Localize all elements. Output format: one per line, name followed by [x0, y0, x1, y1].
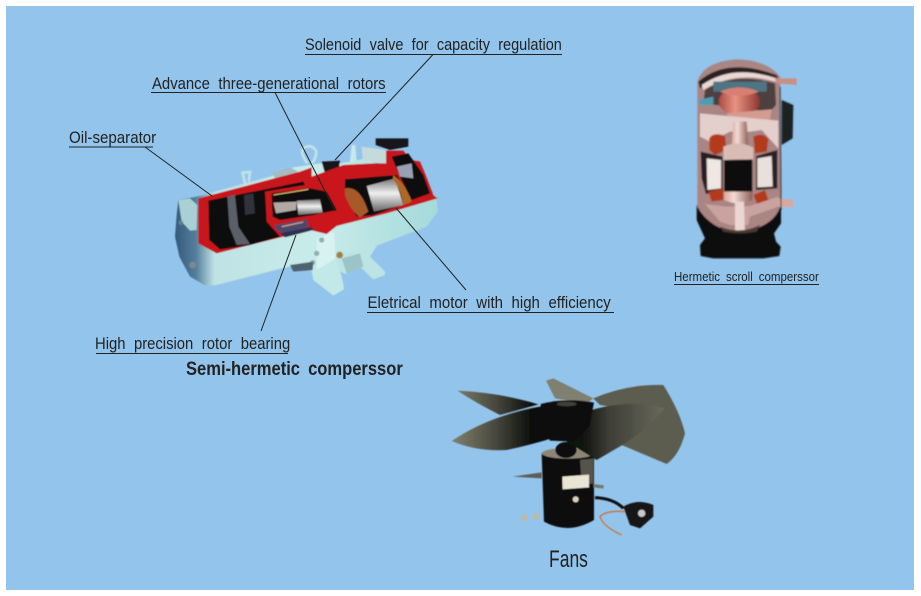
motor label: [562, 475, 589, 489]
label: solenoid valve: [305, 36, 562, 160]
mounting brackets: [513, 472, 542, 478]
oil separator chamber: [208, 182, 305, 249]
label: rotors: Advance three-generational rotors: [152, 75, 386, 93]
left lower blade: [452, 406, 552, 450]
top dome: [698, 67, 778, 88]
lifting eyes: [243, 146, 316, 183]
terminal box interior: [392, 153, 430, 200]
caption: fans: Fans: [549, 545, 588, 572]
rotor: [723, 143, 753, 160]
discharge and suction fittings: [775, 78, 797, 85]
hermetic scroll compressor illustration: [697, 59, 797, 258]
right rear blade: [593, 385, 685, 464]
motor body: [542, 449, 594, 528]
end cap fittings: [178, 198, 197, 231]
lower bearing: [705, 197, 778, 225]
windings: [709, 134, 727, 155]
base: [697, 205, 781, 258]
label: solenoid valve: Solenoid valve for capacity regulation: [305, 36, 562, 54]
back blade: [546, 378, 593, 403]
shell: [175, 158, 438, 285]
label: electrical motor: [367, 208, 614, 312]
stator: [701, 152, 723, 194]
label: oil separator: [69, 129, 212, 196]
side box and pipe: [782, 100, 793, 145]
feet and mounting bracket: [310, 257, 344, 296]
shell: [697, 59, 781, 233]
red cut section: [198, 151, 438, 253]
right front blade: [567, 404, 665, 460]
hub: [541, 400, 594, 442]
rotor chamber: [272, 188, 337, 220]
label: oil separator: Oil-separator: [69, 129, 156, 147]
upper frame: [700, 113, 778, 148]
scroll head: [719, 88, 760, 116]
label: rotor bearing: High precision rotor bearing: [95, 335, 290, 353]
caption: hermetic scroll compressor: Hermetic scroll comperssor: [674, 271, 819, 284]
flange: [317, 232, 336, 270]
motor chamber: [345, 175, 412, 217]
cable and plug: [595, 498, 623, 508]
left upper blade: [457, 391, 538, 415]
label: electrical motor: Eletrical motor with high efficiency: [368, 294, 611, 312]
label: rotor bearing: [95, 235, 296, 354]
fan illustration: [452, 378, 685, 535]
caption: semi-hermetic compressor: Semi-hermetic comperssor: [186, 357, 403, 379]
semi-hermetic compressor illustration: [175, 138, 438, 296]
top boxes: [362, 147, 387, 165]
label: rotors: [151, 75, 386, 211]
small nuts: [521, 515, 528, 521]
